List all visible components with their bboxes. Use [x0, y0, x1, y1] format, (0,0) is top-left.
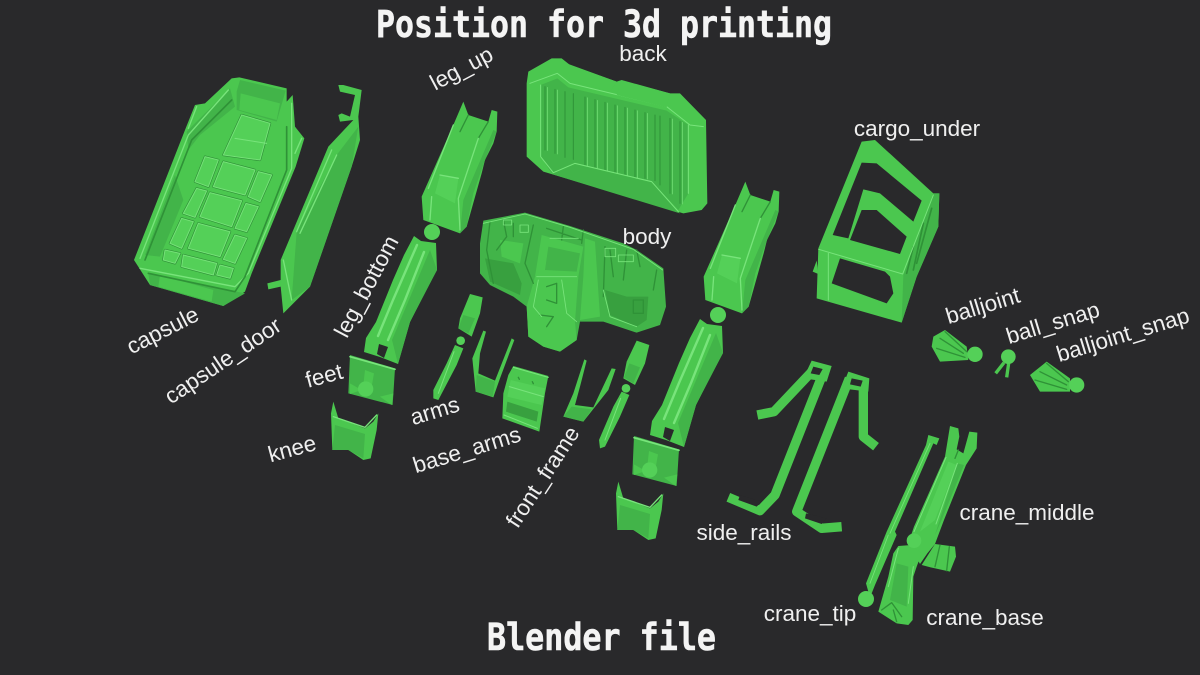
part: crane_tip	[858, 435, 939, 607]
part: leg_up left	[422, 102, 497, 233]
part: feet right	[632, 436, 679, 486]
label: capsule_door: capsule_door	[160, 312, 286, 409]
part: knee left	[331, 402, 378, 460]
part: side_rails	[728, 361, 876, 528]
label: feet: feet	[303, 359, 346, 393]
label: leg_bottom: leg_bottom	[329, 231, 404, 341]
part: cargo_under	[813, 140, 939, 323]
part: front_frame right	[563, 359, 616, 422]
label: balljoint: balljoint	[943, 283, 1024, 329]
label: ball_snap: ball_snap	[1003, 297, 1103, 349]
part: capsule	[134, 77, 304, 306]
label: knee: knee	[265, 430, 319, 467]
label: front_frame: front_frame	[501, 422, 585, 532]
label: arms: arms	[407, 392, 462, 430]
part: arms right	[599, 341, 649, 448]
part: arms left	[433, 294, 483, 400]
title: Position for 3d printing	[376, 4, 832, 47]
part: back panel	[527, 58, 707, 213]
label: side_rails: side_rails	[696, 520, 792, 545]
label: back: back	[619, 41, 668, 66]
subtitle: Blender file: Blender file	[487, 617, 716, 660]
label: capsule: capsule	[122, 302, 203, 359]
seat cushions	[163, 115, 272, 278]
part: leg_bottom left	[364, 224, 440, 364]
part: crane_middle	[908, 426, 977, 572]
part: balljoint_snap	[1030, 362, 1084, 393]
label: balljoint_snap: balljoint_snap	[1053, 303, 1192, 367]
labels	[122, 41, 1192, 630]
label: crane_middle: crane_middle	[959, 500, 1095, 525]
part: crane_base	[878, 533, 922, 625]
part: ball_snap	[996, 349, 1016, 377]
label: cargo_under: cargo_under	[854, 116, 981, 141]
label: base_arms: base_arms	[410, 422, 524, 478]
part: body	[480, 213, 666, 352]
part: feet left	[348, 355, 395, 405]
part: capsule_door	[267, 85, 362, 313]
part: leg_up right	[704, 182, 779, 313]
label: crane_base: crane_base	[926, 605, 1044, 630]
part: balljoint	[932, 330, 983, 362]
label: leg_up: leg_up	[426, 41, 497, 95]
label: body: body	[623, 224, 672, 249]
part: front_frame left	[472, 331, 514, 397]
label: crane_tip: crane_tip	[764, 601, 856, 626]
part: leg_bottom right	[650, 307, 726, 447]
part: base_arms	[502, 366, 548, 432]
part: knee right	[616, 482, 663, 540]
